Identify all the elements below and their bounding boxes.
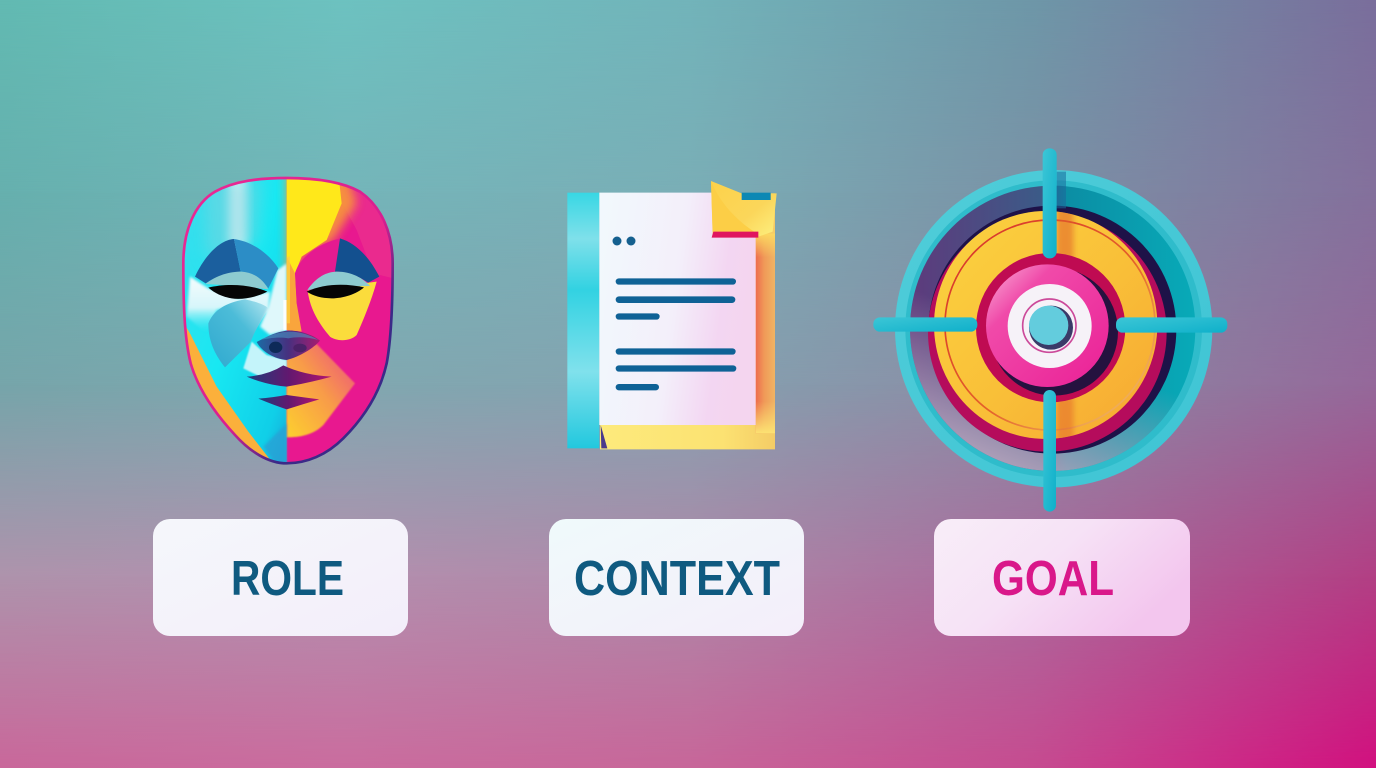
mask right eyelid [307,238,379,290]
mask rim [183,178,393,463]
document orange side shade [756,233,775,433]
mask eye openings [208,285,364,299]
target orange disc [934,211,1157,439]
mask forehead yellow [287,173,357,332]
target shaded ring [910,186,1195,471]
label: CONTEXT [549,519,804,636]
mask nose bridge orange [287,257,303,332]
mask centre nose light [243,342,287,377]
mask under-eye yellow [308,282,377,340]
crosshair: left [873,317,977,332]
mask forehead highlight [228,177,247,247]
mask forehead pink-orange blend [348,190,392,278]
label: ROLE: ROLE [231,552,344,606]
label: GOAL [934,519,1190,636]
label: GOAL: GOAL [992,552,1114,606]
mask right half pink [287,173,397,467]
target crimson ring [976,253,1125,402]
mask nose [257,331,320,360]
mask lips [247,365,332,409]
mask nose bridge highlight [260,263,287,335]
document paper sheet [599,193,756,425]
mask lower right orange panel [287,344,355,437]
crosshair: top [1043,148,1057,258]
label: ROLE [153,519,408,636]
document blue tab [742,193,771,200]
mask under-eye light area [187,277,270,333]
mask lower left orange panel [186,328,270,459]
crosshair: bottom [1043,390,1056,512]
document spine corner [601,425,607,448]
document text lines [616,278,736,390]
document teal spine [567,193,599,448]
document dots [612,236,635,245]
label: CONTEXT: CONTEXT [574,552,780,606]
icon: theatre mask [180,173,400,467]
target pink disc [986,264,1109,387]
document folded corner [711,181,777,238]
mask left eyelid [195,239,278,289]
document yellow back page [600,193,775,449]
document red bar [712,232,758,238]
mask right eye socket [295,239,340,340]
target white ring [1008,284,1092,368]
mask chin lower blue shade [263,423,287,465]
crosshair shadows on disc [1057,207,1073,443]
target dark ring [928,206,1176,454]
icon: document [567,181,777,449]
target centre dot [1029,306,1068,345]
icon: target [873,148,1227,512]
mask left half cyan [180,173,287,467]
target outer ring [895,170,1212,487]
crosshair shadow on outer ring [1057,172,1066,208]
crosshair: right [1116,317,1227,333]
mask left cheek shadow [208,299,268,367]
